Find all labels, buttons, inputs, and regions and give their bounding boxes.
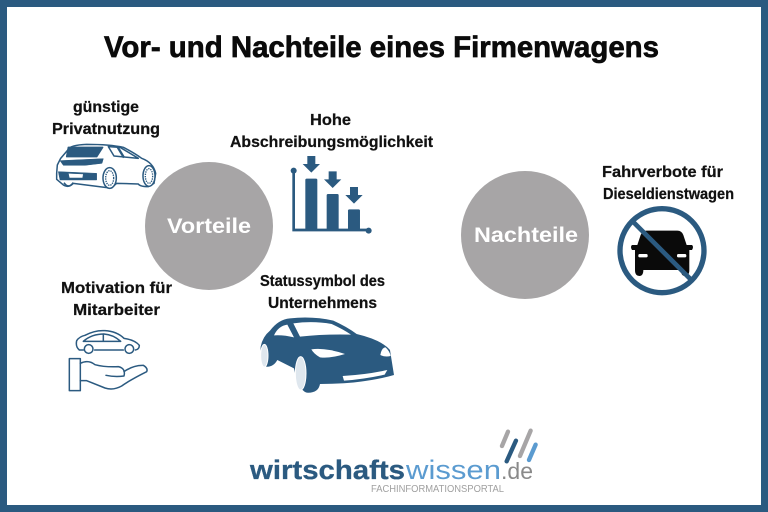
label: Statussymbol des Unternehmens <box>260 273 385 312</box>
label: Motivation für Mitarbeiter: Mitarbeiter <box>73 302 160 319</box>
label: Fahrverbote für Dieseldienstwagen: Fahrverbote für <box>602 164 723 181</box>
title: Vor- und Nachteile eines Firmenwagens <box>104 31 659 64</box>
circle: Nachteile <box>461 171 589 299</box>
logo: wirtschaftswissen.de: wissen <box>405 455 501 485</box>
icon: no diesel car sign <box>620 209 704 293</box>
label: Statussymbol des Unternehmens: Unternehmens <box>268 295 377 312</box>
label: Hohe Abschreibungsmöglichkeit <box>230 112 433 151</box>
label: günstige Privatnutzung <box>52 99 160 138</box>
icon: falling bar chart <box>291 156 372 234</box>
logo: wirtschaftswissen.de: .de <box>501 458 533 484</box>
circle: Vorteile <box>145 162 273 290</box>
label: Fahrverbote für Dieseldienstwagen <box>602 164 734 203</box>
label: Statussymbol des Unternehmens: Statussymbol des <box>260 273 385 290</box>
label: Motivation für Mitarbeiter <box>61 280 172 319</box>
label: Fahrverbote für Dieseldienstwagen: Dieseldienstwagen <box>603 186 734 203</box>
circle: Nachteile: Nachteile <box>474 224 578 247</box>
icon: sports car <box>261 318 394 393</box>
icon: hatchback car rear view <box>57 144 156 188</box>
circle: Vorteile: Vorteile <box>167 215 251 238</box>
label: Hohe Abschreibungsmöglichkeit: Hohe <box>310 112 351 129</box>
label: günstige Privatnutzung: günstige <box>73 99 139 116</box>
icon: car on open hand <box>69 331 147 391</box>
logo: wirtschaftswissen.de: FACHINFORMATIONSPORTAL <box>371 484 504 495</box>
label: günstige Privatnutzung: Privatnutzung <box>52 121 160 138</box>
logo: wirtschaftswissen.de: wirtschafts <box>249 455 405 485</box>
logo: wirtschaftswissen.de <box>249 431 536 495</box>
label: Motivation für Mitarbeiter: Motivation für <box>61 280 172 297</box>
label: Hohe Abschreibungsmöglichkeit: Abschreibungsmöglichkeit <box>230 134 433 151</box>
